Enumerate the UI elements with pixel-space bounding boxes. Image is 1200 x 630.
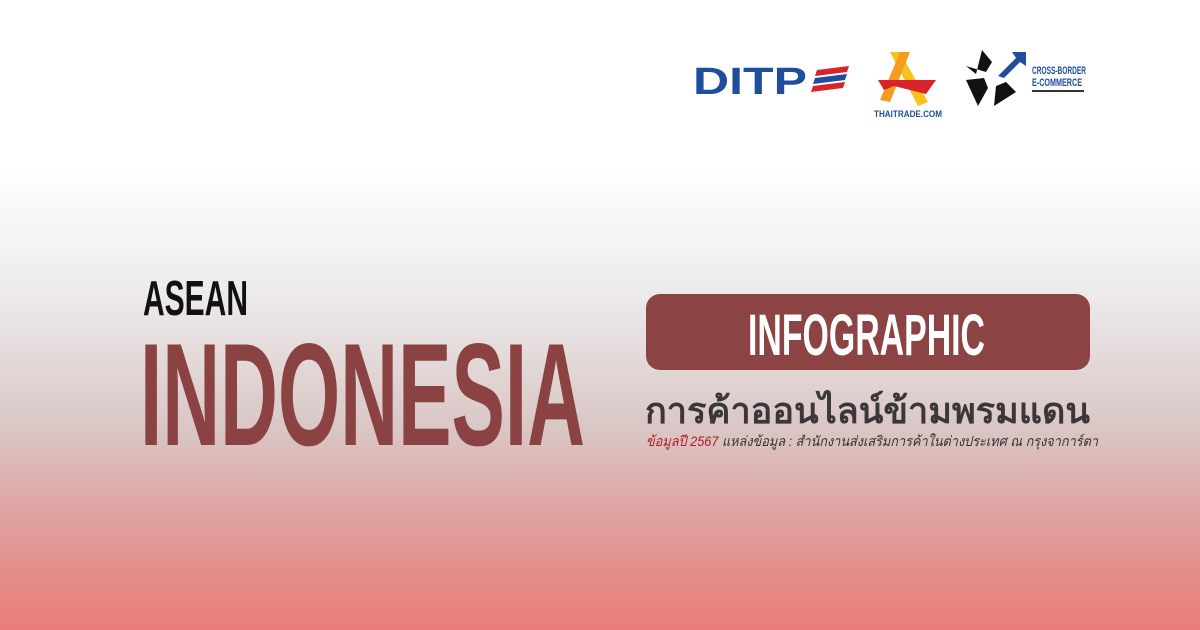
logo: cross-border e-commerce — [966, 50, 1086, 106]
subtitle thai: การค้าออนไลน์ข้ามพรมแดน — [645, 389, 1090, 431]
logo: thaitrade — [874, 52, 942, 119]
pill: INFOGRAPHIC — [646, 294, 1090, 370]
logo: DITP — [693, 62, 849, 98]
